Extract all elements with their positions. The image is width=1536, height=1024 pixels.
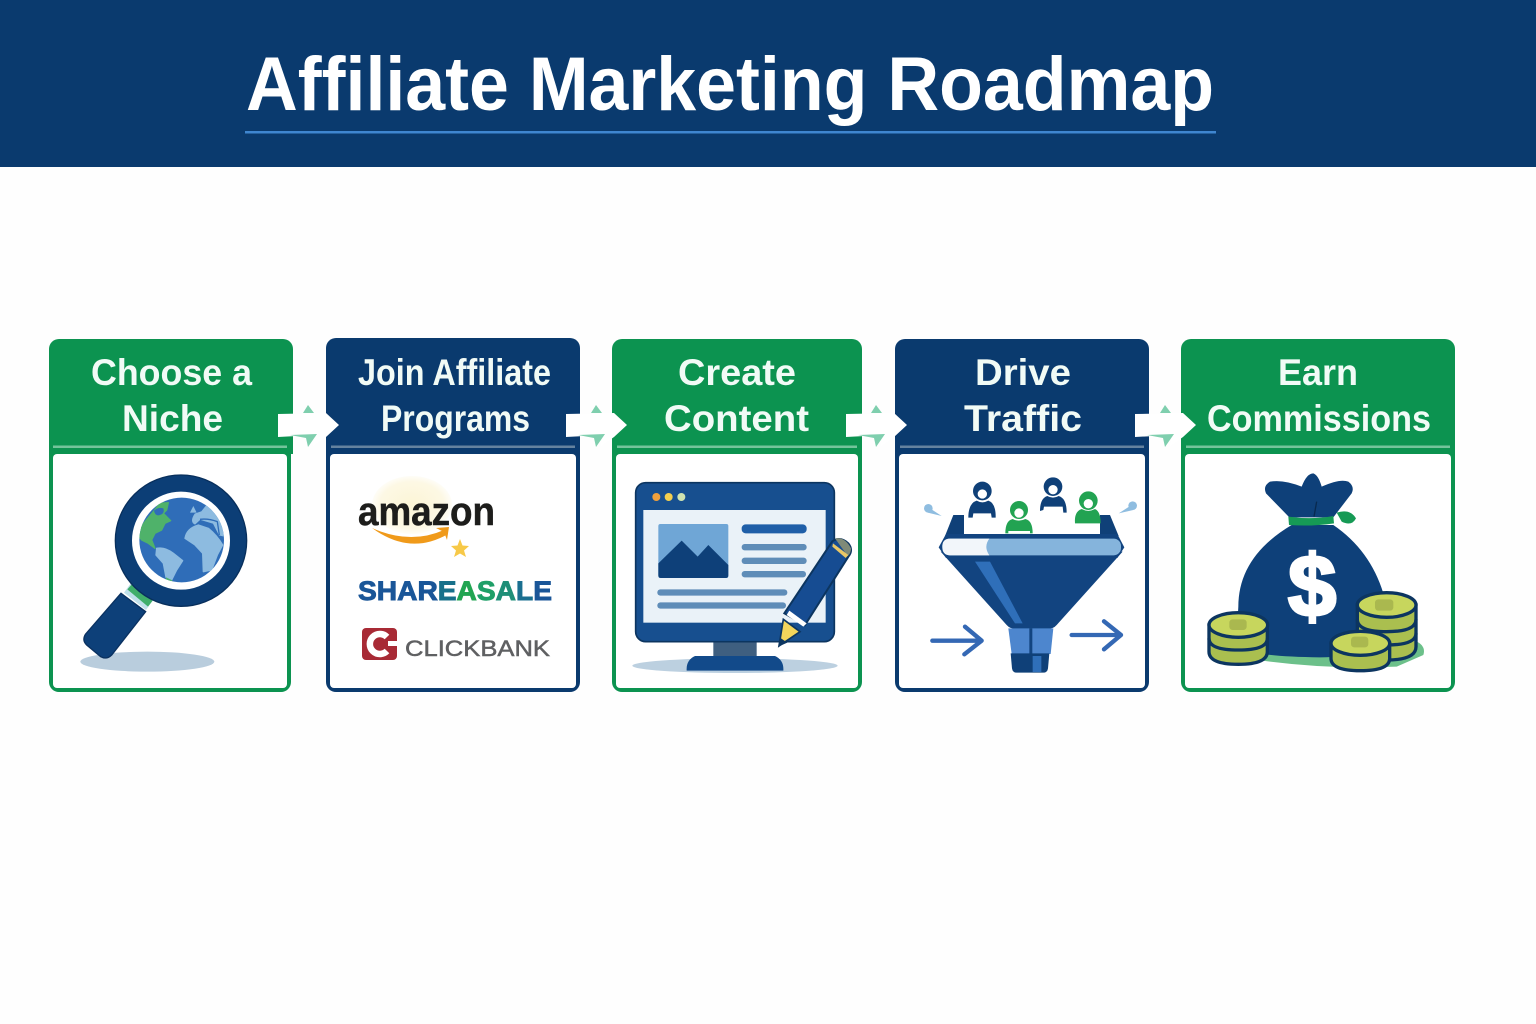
heading: drive traffic: Drive — [975, 352, 1071, 393]
person 1 — [968, 482, 996, 518]
logo: shareasale: SHAREASALE — [358, 576, 552, 606]
heading: earn commissions: Earn — [1278, 352, 1358, 393]
heading: create content — [664, 352, 809, 439]
coin stack: front — [1331, 631, 1390, 671]
heading: create content: Content — [664, 398, 809, 439]
arrow: step 3 to 4 — [846, 405, 907, 447]
header band — [0, 0, 1536, 167]
heading: earn commissions: Commissions — [1207, 398, 1431, 439]
logo: amazon: amazon — [358, 490, 495, 534]
person 3 — [1040, 477, 1067, 513]
arrow: step 2 to 3 — [566, 405, 627, 447]
heading: choose a niche — [91, 352, 252, 439]
heading: join affiliate programs: Programs — [381, 398, 530, 439]
logo: clickbank — [362, 628, 550, 661]
heading: join affiliate programs — [358, 352, 551, 439]
icon: magnifying glass over globe — [80, 475, 247, 672]
panel: create content — [612, 339, 862, 692]
icon: monitor with pen — [632, 483, 851, 673]
coin stack: left — [1209, 613, 1268, 664]
globe — [137, 498, 227, 585]
panel: earn commissions — [1181, 339, 1455, 692]
heading: create content: Create — [678, 352, 796, 393]
person 2 — [1005, 501, 1033, 533]
icon: money bag with coins — [1209, 473, 1424, 671]
arrow: step 1 to 2 — [278, 405, 339, 447]
person 4 — [1075, 491, 1101, 523]
heading: earn commissions — [1207, 352, 1431, 439]
heading: choose a niche: Niche — [122, 398, 223, 439]
coin stack: right — [1357, 593, 1416, 660]
heading: drive traffic — [964, 352, 1082, 439]
panel: join affiliate programs — [326, 338, 580, 692]
panel: choose a niche — [49, 339, 293, 692]
heading: join affiliate programs: Join Affiliate — [358, 352, 551, 393]
logo: clickbank: CLICKBANK — [405, 636, 550, 661]
panel: drive traffic — [895, 339, 1149, 692]
heading: choose a niche: Choose a — [91, 352, 252, 393]
title: Affiliate Marketing Roadmap — [246, 42, 1214, 127]
logo: amazon — [358, 476, 495, 557]
icon: traffic funnel — [924, 477, 1137, 673]
heading: drive traffic: Traffic — [964, 398, 1082, 439]
dollar sign: $ — [1288, 537, 1336, 635]
arrow: step 4 to 5 — [1135, 405, 1196, 447]
